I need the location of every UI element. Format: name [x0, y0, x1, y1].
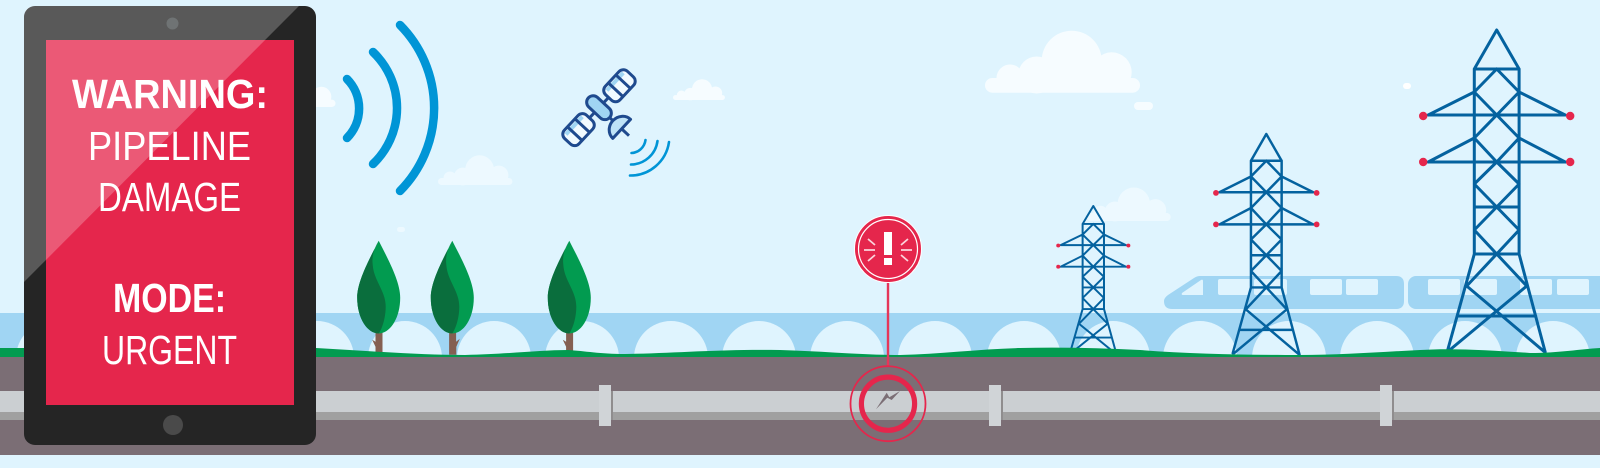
satellite dish	[601, 108, 638, 145]
warning heading: WARNING:	[72, 71, 268, 117]
mode heading: MODE:	[113, 275, 226, 321]
warning detail line 2: DAMAGE	[98, 174, 241, 220]
pipe flange 1	[599, 385, 613, 426]
satellite body	[584, 93, 614, 122]
damage marker	[850, 216, 926, 441]
tree 2	[431, 241, 474, 355]
large pylon	[1419, 30, 1574, 352]
connector line	[887, 280, 889, 367]
ground	[0, 357, 1600, 455]
small pylon	[1056, 206, 1130, 354]
clouds	[258, 31, 1411, 232]
alert badge	[854, 216, 922, 282]
tablet home button	[163, 415, 183, 435]
solar panel upper	[601, 67, 638, 104]
solar panel lower	[560, 111, 597, 148]
viaduct with arches	[0, 313, 1600, 395]
warning detail line 1: PIPELINE	[88, 123, 251, 169]
grass strip	[0, 347, 1600, 358]
tablet screen	[46, 40, 294, 405]
connector arms	[589, 97, 609, 118]
pipe flange 3	[1380, 385, 1394, 426]
pipe flange 2	[989, 385, 1003, 426]
crack in pipe	[876, 391, 900, 409]
tree 1	[357, 241, 400, 353]
pipeline	[0, 385, 1600, 426]
satellite	[557, 64, 660, 169]
tablet body	[24, 6, 316, 445]
tree 3	[548, 241, 591, 353]
train	[1164, 276, 1600, 309]
medium pylon	[1213, 134, 1320, 355]
tablet camera	[166, 18, 178, 30]
screen gloss	[24, 6, 299, 282]
mode value: URGENT	[102, 327, 237, 373]
satellite signal arcs	[630, 140, 669, 176]
damage rings	[850, 366, 926, 441]
tablet	[24, 6, 316, 445]
wifi signal arcs	[347, 25, 434, 191]
